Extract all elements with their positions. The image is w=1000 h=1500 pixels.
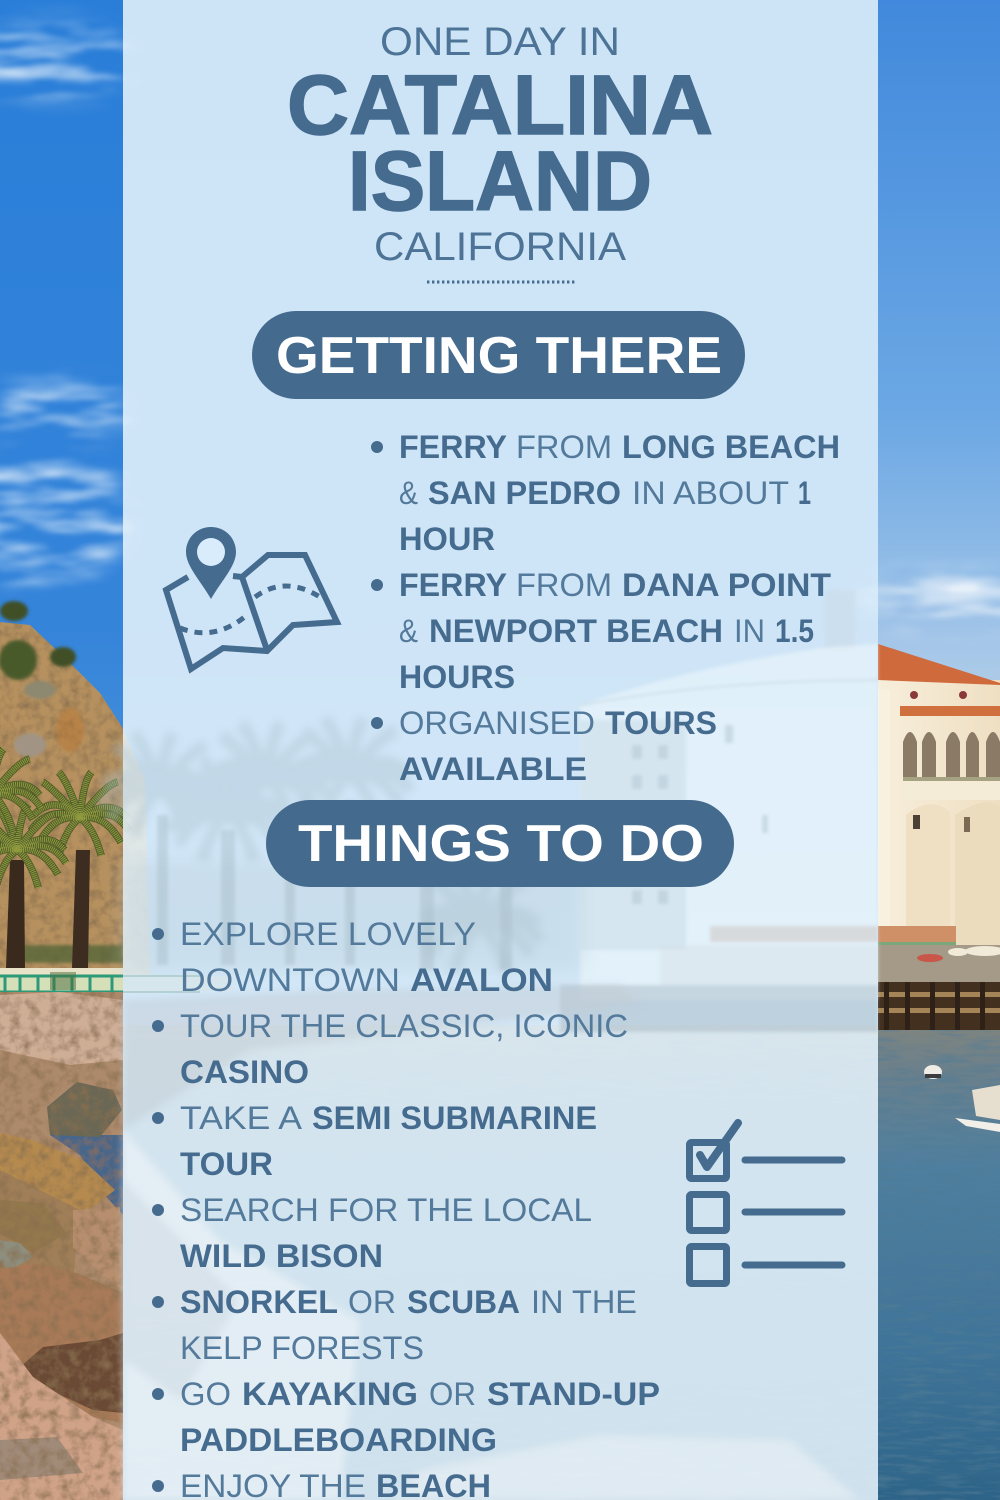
item: ferry from Long Beach: SAN PEDRO [428,475,621,511]
item: wild bison [152,1192,592,1274]
item: organised tours: ORGANISED [399,705,595,741]
list: getting there [371,429,840,787]
item: ferry from Long Beach: & [399,475,418,511]
hazy casino building [560,590,878,1032]
cliff [0,622,150,975]
item: downtown Avalon: EXPLORE LOVELY [180,916,476,952]
cliff shrubs [0,601,123,963]
title [287,20,713,269]
item: snorkel or scuba: KELP FORESTS [180,1330,424,1366]
item: snorkel or scuba: IN THE [531,1284,637,1320]
item: casino: TOUR THE CLASSIC, ICONIC [180,1008,628,1044]
hazy scene showing through panel [100,590,878,1500]
item: ferry from Dana Point [371,567,831,695]
item: ferry from Dana Point: FROM [516,567,612,603]
heading: getting there [252,311,745,399]
item: snorkel or scuba: OR [348,1284,396,1320]
item: casino: CASINO [180,1054,309,1090]
harbour water [123,1025,1000,1500]
item: kayaking or paddleboarding: STAND-UP [487,1376,660,1412]
palm trees [0,749,129,968]
item: ferry from Long Beach: HOUR [399,521,495,557]
item: semi submarine: TOUR [180,1146,273,1182]
item: ferry from Dana Point: DANA POINT [622,567,831,603]
item: casino [152,1008,628,1090]
title line: California: CALIFORNIA [374,225,626,269]
hazy fence and rocks [123,976,860,1500]
item: ferry from Long Beach: FROM [516,429,612,465]
shoreline and fence [0,968,123,994]
heading: things to do: THINGS TO DO [298,815,704,873]
item: semi submarine: SEMI SUBMARINE [312,1100,597,1136]
boat [955,1085,1000,1132]
item: kayaking or paddleboarding [152,1376,660,1458]
item: wild bison: WILD BISON [180,1238,383,1274]
item: downtown Avalon: DOWNTOWN [180,962,400,998]
heading: getting there: GETTING THERE [276,327,722,385]
heading: things to do [266,800,734,887]
list: things to do [152,916,660,1500]
item: ferry from Long Beach: 1 [798,475,811,511]
item: downtown Avalon: AVALON [410,962,553,998]
item: semi submarine [152,1100,597,1182]
item: downtown Avalon [152,916,553,998]
shore rocks [0,992,123,1500]
item: ferry from Dana Point: NEWPORT BEACH [429,613,723,649]
item: ferry from Dana Point: FERRY [399,567,507,603]
item: ferry from Long Beach [371,429,840,557]
title line: Catalina: CATALINA [287,58,713,152]
item: kayaking or paddleboarding: PADDLEBOARDING [180,1422,497,1458]
title line: one day in: ONE DAY IN [380,20,620,64]
item: snorkel or scuba [152,1284,637,1366]
item: beach [152,1468,491,1500]
item: ferry from Dana Point: & [399,613,418,649]
upper arches [903,732,1000,777]
icon: checklist [690,1123,842,1284]
item: ferry from Dana Point: 1.5 [775,613,814,649]
item: semi submarine: TAKE A [180,1100,303,1136]
item: organised tours [371,705,717,787]
item: ferry from Long Beach: FERRY [399,429,507,465]
casino facade, right side [878,644,1000,950]
item: kayaking or paddleboarding: KAYAKING [242,1376,418,1412]
item: ferry from Dana Point: IN [734,613,765,649]
icon: map with pin [166,527,337,669]
item: organised tours: TOURS [605,705,717,741]
item: kayaking or paddleboarding: OR [429,1376,476,1412]
item: ferry from Long Beach: LONG BEACH [622,429,840,465]
buoy [924,1065,942,1079]
item: snorkel or scuba: SCUBA [407,1284,520,1320]
item: ferry from Long Beach: IN ABOUT [632,475,789,511]
red roof [878,644,1000,685]
item: ferry from Dana Point: HOURS [399,659,515,695]
item: snorkel or scuba: SNORKEL [180,1284,338,1320]
terrace and pier [878,926,1000,1030]
item: kayaking or paddleboarding: GO [180,1376,231,1412]
panel: translucent column [123,0,878,1500]
clouds [0,22,1000,630]
lower arch bays [906,804,950,950]
item: organised tours: AVAILABLE [399,751,587,787]
title line: Island: ISLAND [348,134,652,228]
sky [0,0,1000,1040]
hazy palm grove [100,719,583,972]
item: wild bison: SEARCH FOR THE LOCAL [180,1192,592,1228]
